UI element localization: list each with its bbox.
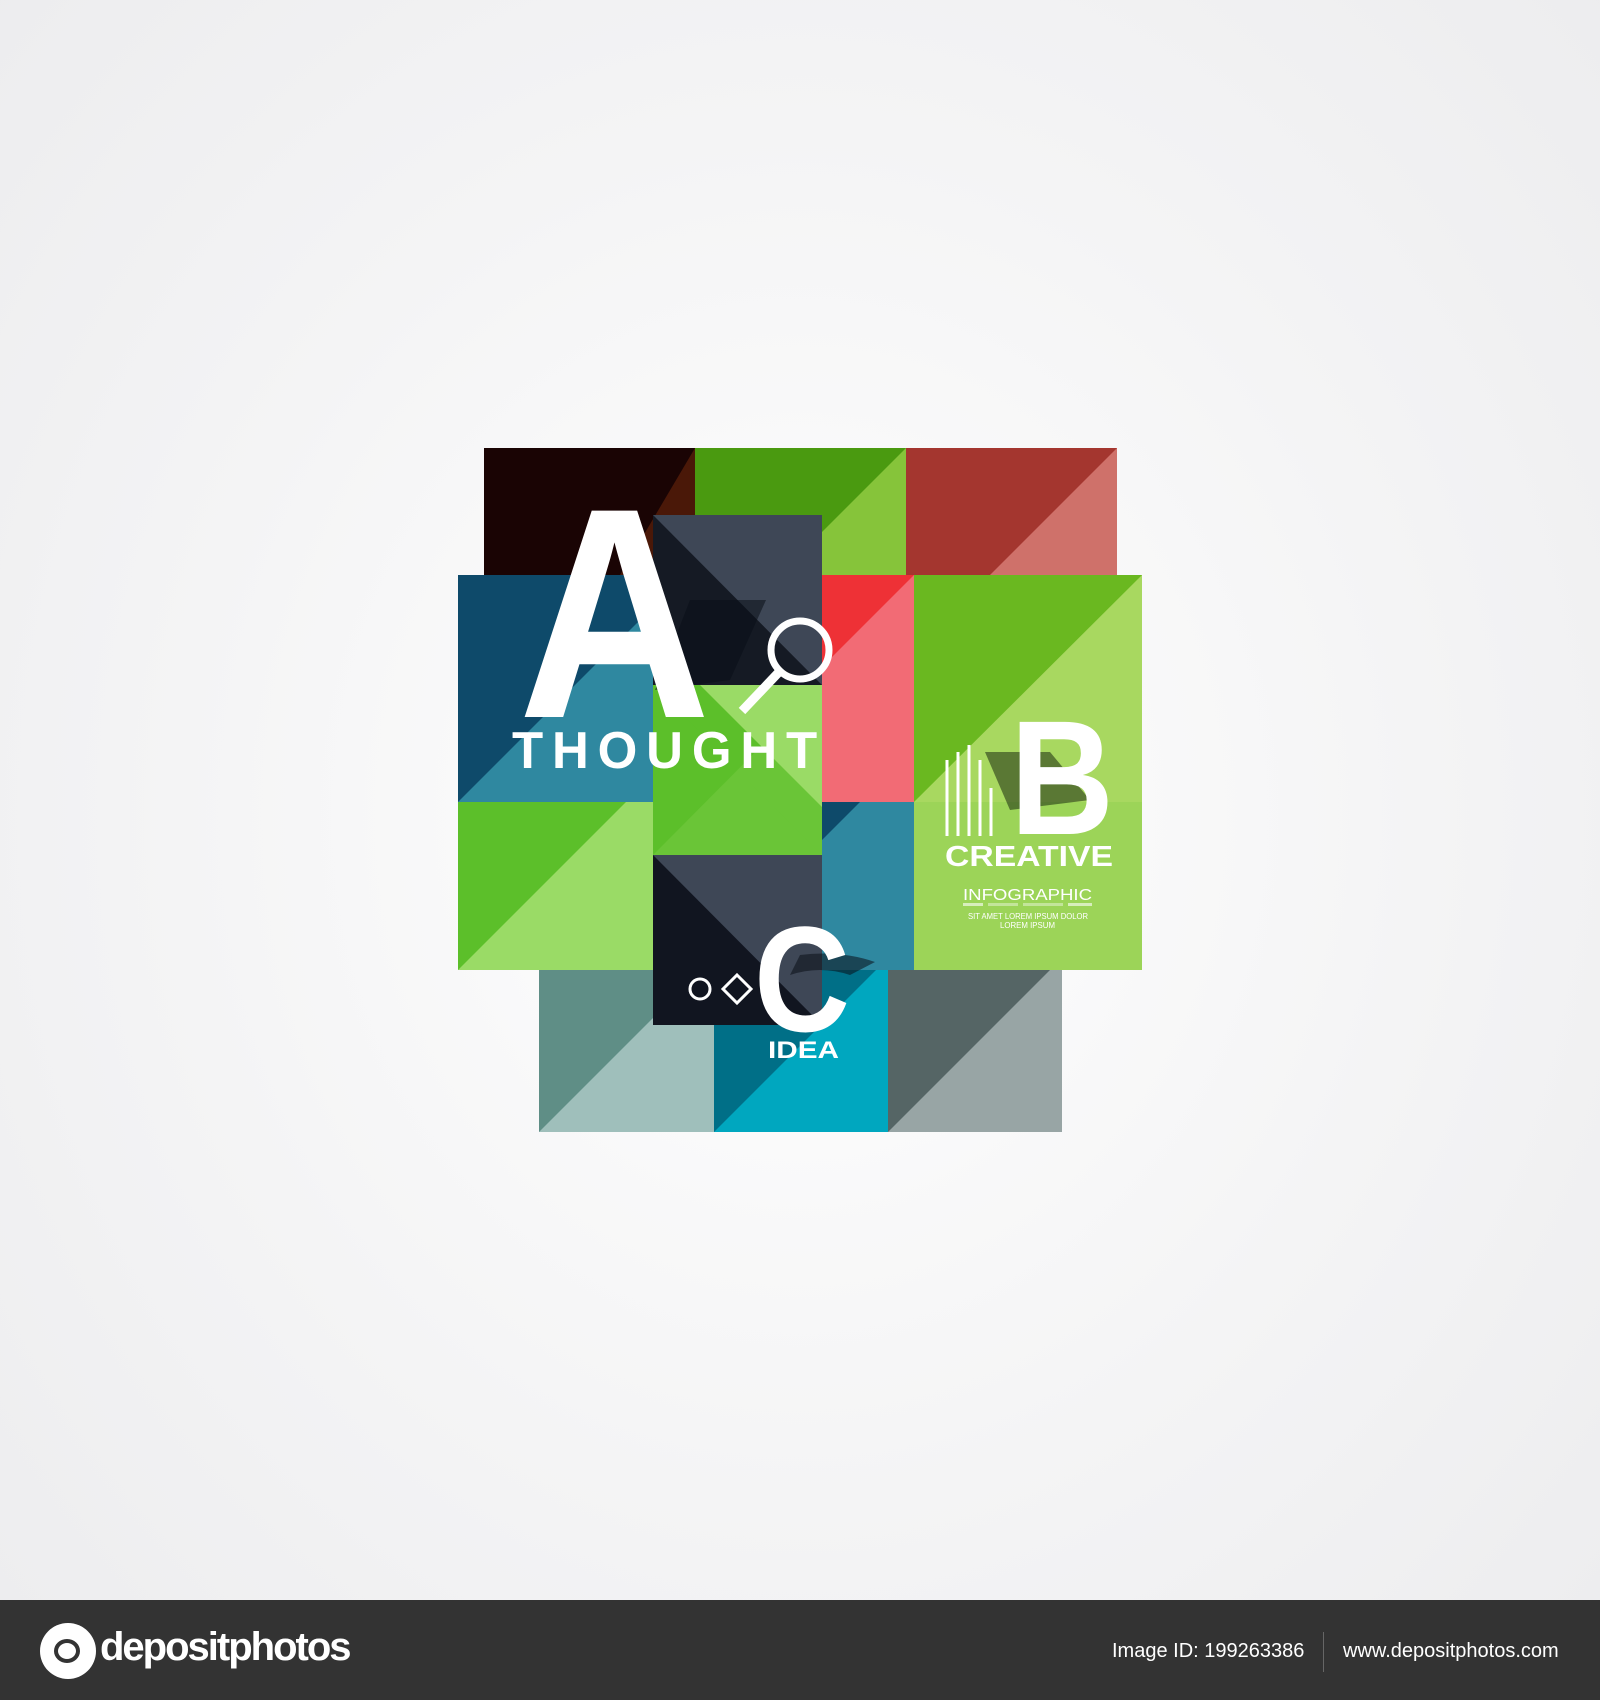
tile: center dark bottom xyxy=(653,855,822,1025)
tile row: top xyxy=(484,448,1117,575)
letter B: B xyxy=(1010,686,1114,869)
label INFOGRAPHIC: LOREM IPSUM xyxy=(1000,921,1055,930)
tile: left blue xyxy=(458,575,653,802)
label INFOGRAPHIC: SIT AMET LOREM IPSUM DOLOR xyxy=(968,912,1088,921)
tile row: bottom xyxy=(539,970,1062,1132)
icon: magnifier xyxy=(742,621,829,711)
footer bar xyxy=(0,1600,1600,1700)
label INFOGRAPHIC: INFOGRAPHIC xyxy=(963,887,1092,904)
tile: center green xyxy=(653,685,822,855)
shadows behind letters xyxy=(655,600,1090,975)
label IDEA: IDEA xyxy=(768,1037,839,1064)
footer url: www.depositphotos.com xyxy=(1343,1640,1559,1662)
footer logo: depositphotos xyxy=(100,1625,350,1669)
label CREATIVE: CREATIVE xyxy=(945,841,1113,873)
tile: center dark top xyxy=(653,515,822,685)
footer logo xyxy=(40,1623,350,1679)
tile: blue right xyxy=(822,802,914,970)
label INFOGRAPHIC xyxy=(963,887,1092,930)
label THOUGHT: THOUGHT xyxy=(512,722,826,780)
letter C: C xyxy=(754,895,850,1063)
letter A: A xyxy=(518,445,711,781)
tile: right green xyxy=(914,575,1142,970)
tile: left green xyxy=(458,802,653,970)
icons: circle and diamond xyxy=(690,975,751,1003)
icon: bars xyxy=(947,745,991,836)
tile: red xyxy=(822,575,914,802)
footer image id: Image ID: 199263386 xyxy=(1112,1640,1304,1662)
